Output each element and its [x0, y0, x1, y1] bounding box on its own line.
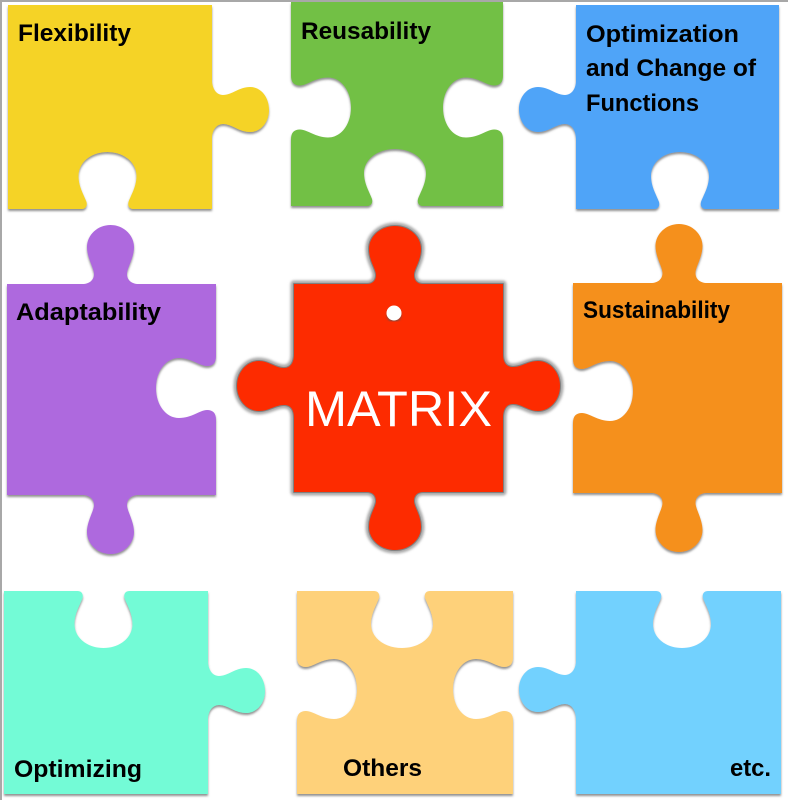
puzzle piece: Reusability: [291, 2, 503, 206]
puzzle piece: Adaptability: [7, 225, 216, 554]
puzzle piece: etc.: etc.: [730, 755, 771, 782]
puzzle piece: Optimizing: Optimizing: [14, 756, 142, 783]
puzzle piece: Sustainability: [573, 224, 782, 552]
puzzle piece: Optimization and Change of Functions: Optimization: [586, 21, 739, 48]
puzzle piece: MATRIX (centre): [237, 226, 560, 550]
puzzle piece: etc.: [519, 591, 781, 794]
puzzle piece: Optimization and Change of Functions: and Change of: [586, 55, 757, 82]
puzzle piece: Optimizing: [4, 591, 265, 794]
puzzle piece: Optimization and Change of Functions: Functions: [586, 90, 699, 117]
puzzle piece: MATRIX (centre): MATRIX: [305, 381, 492, 437]
puzzle piece: Flexibility: Flexibility: [18, 20, 132, 47]
puzzle piece: Optimization and Change of Functions: [519, 5, 779, 209]
puzzle piece: Adaptability: Adaptability: [16, 299, 162, 326]
puzzle piece: Others: [297, 591, 513, 794]
puzzle piece: Others: Others: [343, 755, 422, 782]
puzzle piece: Flexibility: [8, 5, 269, 209]
puzzle piece: Reusability: Reusability: [301, 18, 432, 45]
puzzle piece: Sustainability: Sustainability: [583, 297, 731, 324]
